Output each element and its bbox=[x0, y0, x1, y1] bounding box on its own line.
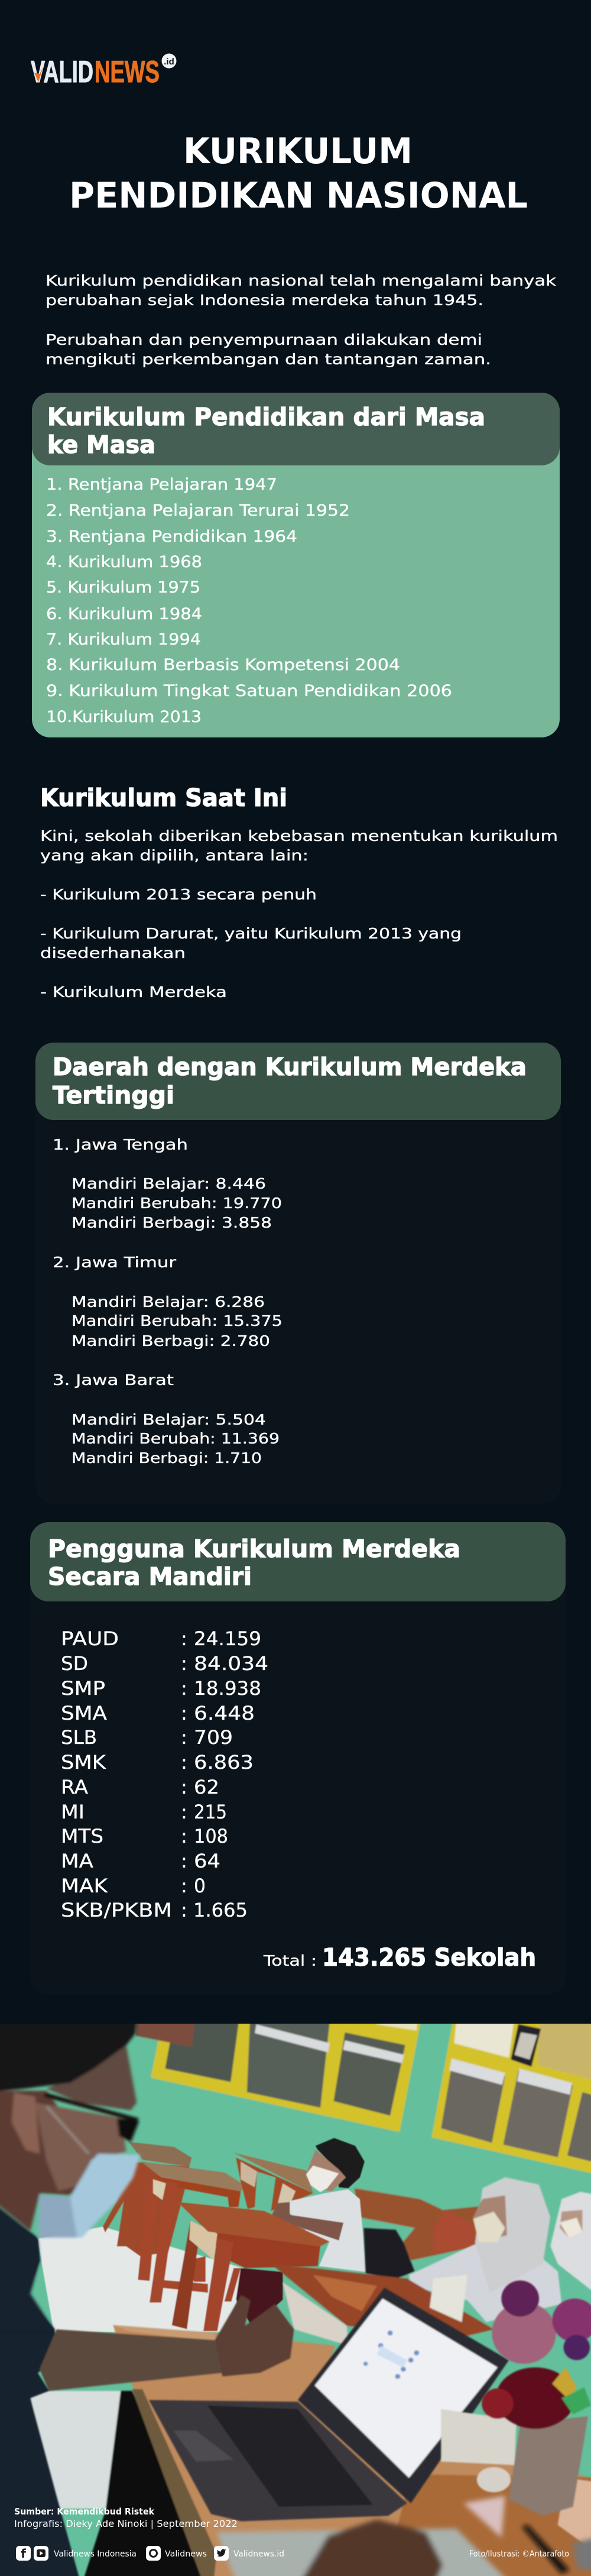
curriculum list: 2. Rentjana Pelajaran Terurai 1952 bbox=[46, 501, 350, 520]
lower floor bbox=[30, 2391, 121, 2509]
school type table: 62 bbox=[194, 1776, 219, 1798]
boy student bbox=[236, 2138, 366, 2327]
intro text: mengikuti perkembangan dan tantangan zaman. bbox=[46, 351, 491, 368]
icon: facebook: f bbox=[21, 2546, 26, 2561]
foreground hand and paper bbox=[217, 2496, 591, 2576]
body text: Kini, sekolah diberikan kebebasan menentukan kurikulum bbox=[40, 827, 558, 844]
panel header bbox=[30, 1522, 566, 1601]
Jawa Barat bbox=[53, 1371, 280, 1467]
laptop bbox=[149, 2287, 509, 2521]
Jawa Tengah: Mandiri Berbagi: 3.858 bbox=[72, 1214, 272, 1231]
panel header bbox=[35, 1043, 561, 1120]
logo: Validnews.id: VALID bbox=[31, 55, 93, 89]
school type table: SMA bbox=[61, 1702, 107, 1724]
title: PENDIDIKAN NASIONAL bbox=[69, 175, 528, 216]
Jawa Tengah: Mandiri Belajar: 8.446 bbox=[72, 1175, 266, 1192]
floor bbox=[37, 2227, 243, 2332]
panel header: Secara Mandiri bbox=[48, 1562, 252, 1591]
body text: - Kurikulum Darurat, yaitu Kurikulum 2013 yang bbox=[40, 925, 462, 942]
Jawa Barat: Mandiri Berubah: 11.369 bbox=[72, 1430, 280, 1447]
section: kurikulum saat ini bbox=[40, 784, 558, 1001]
school type table: 1.665 bbox=[193, 1899, 248, 1921]
logo: Validnews.id bbox=[31, 53, 176, 89]
school type table: RA bbox=[61, 1776, 88, 1798]
Jawa Barat: Mandiri Belajar: 5.504 bbox=[72, 1411, 266, 1428]
school type table: SKB/PKBM bbox=[61, 1899, 172, 1921]
back desk near boy bbox=[233, 2153, 313, 2211]
Jawa Timur: Mandiri Belajar: 6.286 bbox=[72, 1293, 265, 1310]
school type table: SMK bbox=[61, 1751, 106, 1774]
curriculum list: 6. Kurikulum 1984 bbox=[46, 605, 202, 623]
school type table: SMP bbox=[61, 1677, 105, 1700]
boy's desk bbox=[172, 2202, 330, 2331]
school type table bbox=[61, 1627, 268, 1921]
classroom desks and boy bbox=[37, 2138, 366, 2332]
intro text: Perubahan dan penyempurnaan dilakukan demi bbox=[46, 331, 482, 348]
school type table: 0 bbox=[194, 1875, 206, 1897]
school type table: : bbox=[181, 1702, 187, 1724]
backpack bbox=[363, 2228, 415, 2279]
second desk bbox=[138, 2161, 246, 2303]
school type table: : bbox=[181, 1751, 187, 1774]
logo: Validnews.id: NEWS bbox=[95, 55, 160, 89]
panel header: Daerah dengan Kurikulum Merdeka bbox=[53, 1053, 527, 1081]
icon: instagram bbox=[146, 2546, 161, 2561]
curriculum list: 1. Rentjana Pelajaran 1947 bbox=[46, 475, 277, 494]
curriculum list: 7. Kurikulum 1994 bbox=[46, 630, 201, 649]
icon: facebook bbox=[16, 2546, 31, 2561]
icon: youtube bbox=[34, 2546, 48, 2561]
Jawa Tengah bbox=[53, 1136, 282, 1231]
total: 143.265 Sekolah bbox=[322, 1943, 536, 1972]
Jawa Tengah: 1. Jawa Tengah bbox=[53, 1136, 188, 1153]
curriculum list: 5. Kurikulum 1975 bbox=[46, 578, 200, 597]
school type table: 64 bbox=[194, 1850, 220, 1872]
title bbox=[69, 131, 528, 216]
left window bbox=[150, 2024, 421, 2133]
credits: Sumber: Kemendikbud Ristek bbox=[14, 2506, 155, 2517]
Jawa Barat: Mandiri Berbagi: 1.710 bbox=[72, 1449, 262, 1467]
credits: Infografis: Dieky Ade Ninoki | September 2022 bbox=[14, 2518, 238, 2529]
body text: disederhanakan bbox=[40, 944, 186, 962]
school type table: SLB bbox=[61, 1726, 97, 1749]
front desk bbox=[271, 2264, 494, 2336]
panel: kurikulum dari masa ke masa bbox=[32, 393, 560, 737]
girl students bbox=[409, 2177, 591, 2322]
panel header bbox=[32, 393, 560, 465]
Jawa Timur bbox=[53, 1254, 282, 1350]
social links: Validnews.id bbox=[233, 2549, 284, 2559]
school type table: 84.034 bbox=[194, 1652, 268, 1675]
school type table: MTS bbox=[61, 1825, 103, 1847]
school type table: 18.938 bbox=[194, 1677, 261, 1700]
man's head with mask and glasses bbox=[0, 2008, 140, 2331]
school type table: : bbox=[181, 1726, 187, 1749]
school type table: : bbox=[181, 1850, 187, 1872]
Jawa Tengah: Mandiri Berubah: 19.770 bbox=[72, 1195, 282, 1212]
school type table: MAK bbox=[61, 1875, 108, 1897]
body text bbox=[40, 827, 558, 1001]
photo: teacher with laptop in classroom bbox=[0, 1996, 591, 2576]
panel: pengguna kurikulum merdeka bbox=[30, 1522, 566, 1995]
photo credit: Foto/Ilustrasi: ©Antarafoto bbox=[469, 2549, 569, 2559]
curriculum list: 3. Rentjana Pendidikan 1964 bbox=[46, 528, 297, 546]
body text: - Kurikulum Merdeka bbox=[40, 983, 227, 1001]
panel header: ke Masa bbox=[47, 431, 155, 459]
school type table: : bbox=[181, 1627, 187, 1650]
mid right desks bbox=[355, 2188, 479, 2261]
school type table: 215 bbox=[194, 1801, 227, 1823]
school type table: : bbox=[181, 1776, 187, 1798]
school type table: MI bbox=[61, 1801, 85, 1823]
body text: - Kurikulum 2013 secara penuh bbox=[40, 886, 317, 903]
curriculum list: 8. Kurikulum Berbasis Kompetensi 2004 bbox=[46, 656, 400, 674]
school type table: 108 bbox=[194, 1825, 228, 1847]
curriculum list bbox=[46, 475, 452, 726]
right window bbox=[430, 2024, 591, 2174]
social links: Validnews Indonesia bbox=[54, 2549, 137, 2559]
school type table: : bbox=[181, 1677, 187, 1700]
school type table: : bbox=[181, 1825, 187, 1847]
dark under-table bbox=[83, 2390, 202, 2576]
curriculum list: 9. Kurikulum Tingkat Satuan Pendidikan 2006 bbox=[46, 682, 452, 700]
social links bbox=[16, 2546, 284, 2561]
body text: yang akan dipilih, antara lain: bbox=[40, 847, 309, 864]
curriculum list: 4. Kurikulum 1968 bbox=[46, 553, 202, 571]
school type table: : bbox=[181, 1875, 187, 1897]
brown board bbox=[135, 2024, 195, 2047]
school type table: 24.159 bbox=[194, 1627, 261, 1650]
heading: Kurikulum Saat Ini bbox=[40, 784, 287, 812]
credits bbox=[14, 2506, 238, 2529]
intro text bbox=[46, 272, 557, 368]
title: KURIKULUM bbox=[183, 131, 413, 172]
Jawa Timur: Mandiri Berbagi: 2.780 bbox=[72, 1332, 270, 1350]
panel: daerah tertinggi bbox=[35, 1043, 561, 1504]
total: Total : bbox=[263, 1952, 317, 1969]
school type table: MA bbox=[61, 1850, 93, 1872]
chair bbox=[433, 2210, 475, 2253]
Jawa Timur: 2. Jawa Timur bbox=[53, 1254, 177, 1271]
flowers and vase bbox=[441, 2280, 591, 2516]
school type table: 6.448 bbox=[194, 1702, 255, 1724]
man's body bbox=[0, 2192, 294, 2576]
school type table: : bbox=[181, 1652, 187, 1675]
curriculum list: 10.Kurikulum 2013 bbox=[46, 708, 202, 726]
panel header: Pengguna Kurikulum Merdeka bbox=[48, 1535, 460, 1563]
panel header: Kurikulum Pendidikan dari Masa bbox=[47, 403, 485, 431]
Jawa Barat: 3. Jawa Barat bbox=[53, 1371, 174, 1389]
icon: twitter bbox=[214, 2546, 229, 2561]
intro text: perubahan sejak Indonesia merdeka tahun 1945. bbox=[46, 292, 483, 309]
school type table: SD bbox=[61, 1652, 88, 1675]
far desk bbox=[103, 2142, 191, 2256]
school type table: : bbox=[181, 1899, 187, 1921]
logo: Validnews.id: .id bbox=[164, 57, 174, 67]
intro text: Kurikulum pendidikan nasional telah mengalami banyak bbox=[46, 272, 557, 289]
school type table: : bbox=[181, 1801, 187, 1823]
panel header: Tertinggi bbox=[53, 1081, 174, 1109]
school type table: PAUD bbox=[61, 1627, 119, 1650]
social links: Validnews bbox=[165, 2549, 207, 2559]
foreground table bbox=[113, 2325, 591, 2576]
school type table: 709 bbox=[194, 1726, 233, 1749]
Jawa Timur: Mandiri Berubah: 15.375 bbox=[72, 1312, 282, 1329]
school type table: 6.863 bbox=[194, 1751, 254, 1774]
